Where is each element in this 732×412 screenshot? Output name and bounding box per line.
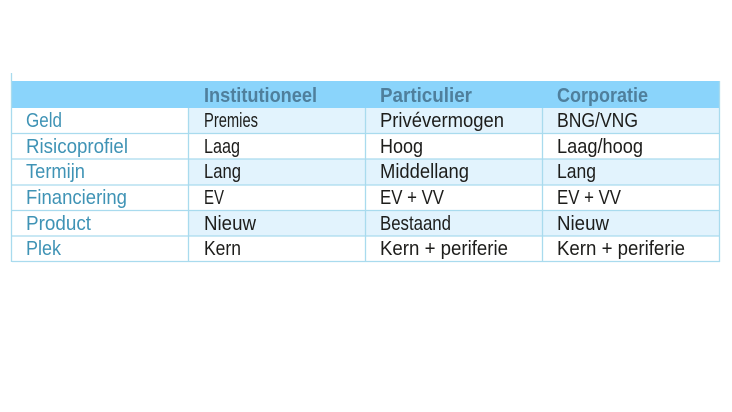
column: Corporatie: Laag/hoog <box>557 135 643 158</box>
column: Corporatie <box>557 109 685 260</box>
column headings: Institutioneel <box>204 84 317 107</box>
column headings: Corporatie <box>557 84 648 107</box>
column: Particulier: EV + VV <box>380 186 444 209</box>
column: Institutioneel: Laag <box>204 135 240 158</box>
header band <box>11 81 720 108</box>
column: Particulier: Privévermogen <box>380 109 504 132</box>
column: Particulier: Kern + periferie <box>380 237 508 260</box>
column: Particulier: Bestaand <box>380 212 451 235</box>
column: Corporatie: Kern + periferie <box>557 237 685 260</box>
row labels: Geld <box>26 109 62 132</box>
column: Institutioneel: Lang <box>204 160 241 183</box>
column: Corporatie: BNG/VNG <box>557 109 638 132</box>
column: Corporatie: Lang <box>557 160 596 183</box>
column: Corporatie: EV + VV <box>557 186 621 209</box>
column headings: Particulier <box>380 84 472 107</box>
column: Particulier: Hoog <box>380 135 423 158</box>
column: Institutioneel <box>204 109 258 260</box>
row labels: Financiering <box>26 186 127 209</box>
row labels: Risicoprofiel <box>26 135 128 158</box>
column: Institutioneel: EV <box>204 186 224 209</box>
row labels: Termijn <box>26 160 85 183</box>
column: Institutioneel: Nieuw <box>204 212 256 235</box>
column: Particulier <box>380 109 508 260</box>
row labels: Plek <box>26 237 62 260</box>
column: Particulier: Middellang <box>380 160 469 183</box>
tinted row backgrounds <box>188 108 720 236</box>
column: Corporatie: Nieuw <box>557 212 609 235</box>
comparison table <box>11 73 720 262</box>
row labels: Product <box>26 212 91 235</box>
row labels <box>26 109 128 260</box>
column: Institutioneel: Kern <box>204 237 241 260</box>
column: Institutioneel: Premies <box>204 109 258 132</box>
column headings <box>204 84 648 107</box>
